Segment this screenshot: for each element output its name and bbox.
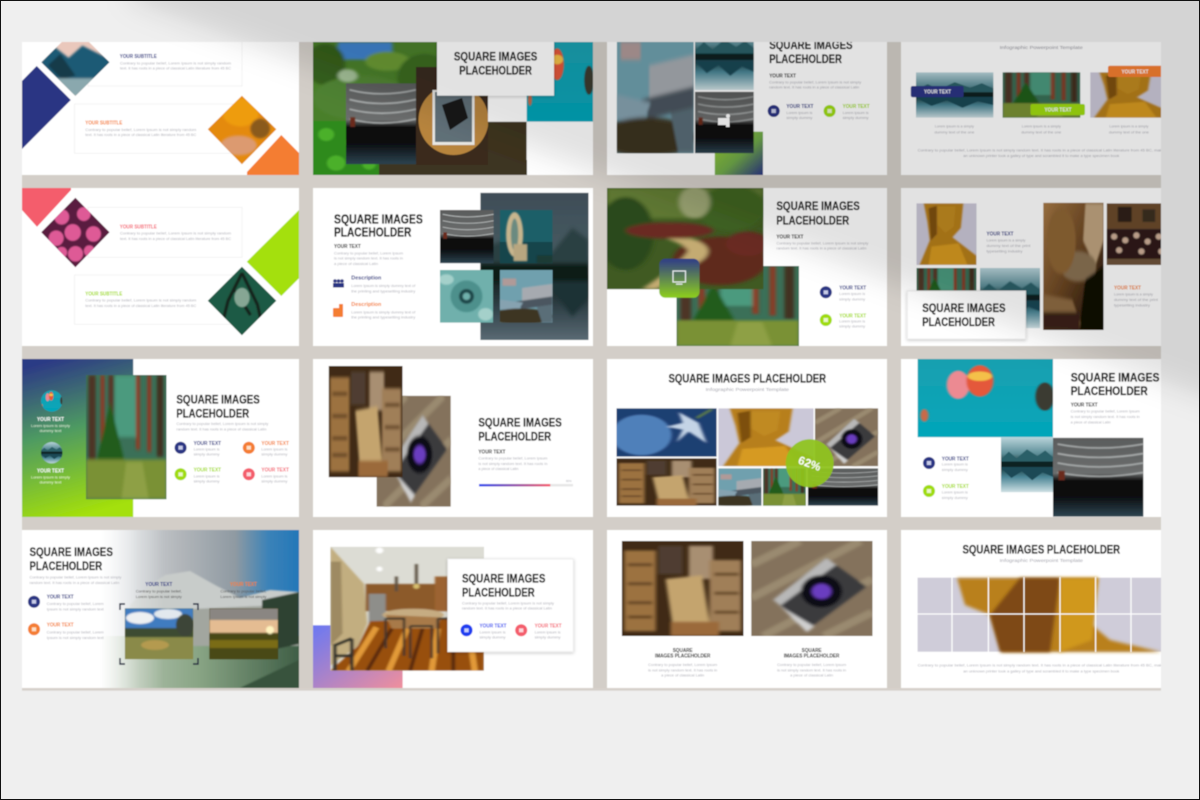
- center caption orange: Lorem Ipsum is not simply: [220, 595, 267, 599]
- panel: slide 13 landscape: [22, 530, 299, 688]
- paragraph: [918, 663, 1168, 673]
- heading: PLACEHOLDER: [176, 406, 249, 420]
- text box two: text. It has roots in a piece of classical Latin literature from 45 BC: [85, 304, 197, 308]
- kitchen photo: [330, 547, 484, 671]
- dark boat photo: [695, 92, 754, 153]
- text box one: YOUR SUBTITLE: [120, 225, 157, 231]
- your text block: [334, 244, 403, 266]
- text box two: [75, 275, 233, 324]
- camera photo: [815, 408, 878, 466]
- meadow photo with brackets: [120, 604, 198, 664]
- item lime: Lorem ipsum is: [942, 491, 968, 495]
- orange diamond shape: [247, 135, 299, 175]
- text box one: text. It has roots in a piece of classical Latin literature from 45 BC: [120, 66, 232, 70]
- orange text: YOUR TEXT: [1114, 285, 1142, 291]
- center caption orange: [220, 582, 267, 599]
- heading: SQUARE IMAGES PLACEHOLDER: [962, 543, 1120, 557]
- item lime: Lorem ipsum is: [839, 320, 866, 324]
- heading: PLACEHOLDER: [30, 559, 102, 573]
- camera photo: [751, 541, 872, 636]
- captions: [934, 125, 1149, 134]
- heading: PLACEHOLDER: [478, 430, 551, 444]
- text box two: Contrary to popular belief, Lorem Ipsum is not simply random: [85, 128, 197, 132]
- title card: Contrary to popular belief, Lorem Ipsum is not simply: [462, 601, 554, 605]
- balloon circle and label: [31, 390, 70, 433]
- lake photo: [694, 41, 754, 90]
- item coral: simply dummy: [535, 636, 561, 640]
- caption right: IMAGES PLACEHOLDER: [784, 654, 839, 660]
- item lime: YOUR TEXT: [942, 484, 969, 490]
- heading: SQUARE IMAGES PLACEHOLDER: [668, 372, 826, 386]
- your text block: is not simply random text. It has roots in: [334, 257, 403, 261]
- title card: SQUARE IMAGES: [462, 572, 545, 586]
- heading: [176, 392, 260, 420]
- item navy: Lorem ipsum is: [194, 447, 220, 451]
- forest photo: [86, 375, 166, 499]
- description navy: [351, 276, 416, 293]
- item navy: [820, 285, 867, 301]
- heading: SQUARE IMAGES: [769, 38, 853, 52]
- center caption orange: YOUR TEXT: [230, 582, 258, 588]
- item navy: Lorem ipsum is: [942, 463, 968, 467]
- item navy: Lorem ipsum is: [786, 111, 813, 115]
- text box one: text. It has roots in a piece of classical Latin literature from 45 BC: [120, 237, 232, 241]
- your text block: random text. It has roots in a piece of classical Latin: [776, 247, 867, 251]
- navy text: Lorem ipsum is a simply: [986, 239, 1026, 243]
- subtitle: Infographic Powerpoint Template: [706, 387, 790, 392]
- title box: PLACEHOLDER: [459, 64, 532, 78]
- item navy: [768, 104, 814, 120]
- caption right: [777, 648, 847, 678]
- item orange: [28, 623, 104, 640]
- item coral: YOUR TEXT: [535, 624, 562, 630]
- gold photo with tag: [1090, 66, 1168, 118]
- captions: dummy text of the one: [1109, 130, 1149, 134]
- lake circle and label: dummy text: [40, 481, 62, 485]
- caption left: [648, 648, 718, 678]
- item navy: YOUR TEXT: [786, 104, 814, 110]
- item blue: Lorem ipsum is: [480, 630, 506, 634]
- panel: slide 1 diamonds navy orange: [21, 28, 299, 175]
- boat photo: [808, 468, 878, 506]
- navy text: [986, 232, 1031, 253]
- item navy: YOUR TEXT: [942, 456, 969, 462]
- paragraph: [918, 148, 1168, 158]
- forest photo: [763, 468, 806, 506]
- progress bar: [479, 479, 573, 486]
- item navy: [923, 456, 969, 472]
- heading: SQUARE IMAGES: [776, 199, 860, 213]
- heading: SQUARE IMAGES: [478, 416, 562, 430]
- title card: PLACEHOLDER: [462, 586, 535, 600]
- description navy: Lorem Ipsum is simply dummy text of: [351, 284, 415, 288]
- white tile: [488, 104, 528, 123]
- item lime: YOUR TEXT: [843, 104, 870, 110]
- books photo: [622, 541, 744, 636]
- icon: hand: [333, 304, 343, 317]
- your text block: Contrary to popular belief, Lorem Ipsum is not simply: [769, 80, 862, 84]
- item lime: simply dummy: [194, 480, 220, 484]
- item lime: YOUR TEXT: [839, 313, 867, 319]
- orange text: dummy text of the print: [1114, 298, 1158, 302]
- navy text: typesetting industry: [986, 249, 1023, 253]
- caption right: Contrary to popular belief, Lorem Ipsum: [777, 663, 847, 667]
- gold portrait: [916, 203, 976, 265]
- books photo: [616, 458, 717, 506]
- panel: slide 11 mosaic with 62 percent: [607, 359, 887, 517]
- text box one: [88, 207, 242, 257]
- panel: slide 12 balloons: [901, 359, 1161, 517]
- camera print: [432, 90, 474, 145]
- item lime: simply dummy: [942, 496, 968, 500]
- item lime: [175, 468, 222, 484]
- panel: slide 6 collage with descriptions: [313, 188, 593, 346]
- your text block: Contrary to popular belief, Lorem Ipsum is not simply: [776, 241, 869, 245]
- text box one: Contrary to popular belief, Lorem Ipsum is not simply random: [120, 61, 231, 65]
- boat photo: [346, 83, 416, 164]
- panel: slide 3 room collage: [606, 42, 888, 176]
- succulent photo: [439, 270, 493, 323]
- coral shape: [22, 188, 71, 227]
- text box one: YOUR SUBTITLE: [120, 54, 157, 60]
- forest photo: [676, 266, 799, 346]
- item lime: YOUR TEXT: [194, 468, 222, 474]
- item orange: Lorem ipsum is: [261, 447, 288, 451]
- your text block: [776, 235, 869, 251]
- captions: Lorem ipsum is a simply: [1022, 125, 1061, 129]
- item navy: simply dummy: [839, 297, 866, 301]
- heading: PLACEHOLDER: [1071, 384, 1148, 398]
- caption right: is not simply random text. It has roots in: [777, 668, 846, 672]
- forest photo with tag: [1003, 72, 1085, 118]
- your text block: Contrary to popular belief, Lorem Ipsum: [478, 457, 548, 461]
- your text block: YOUR TEXT: [478, 449, 506, 455]
- item blue: [460, 624, 507, 640]
- percent badge: [786, 439, 834, 487]
- garden photo: [598, 186, 770, 289]
- sofa photo: [488, 270, 554, 324]
- heading: SQUARE IMAGES: [334, 212, 423, 227]
- caption left: Contrary to popular belief, Lorem Ipsum: [648, 663, 718, 667]
- heading: [769, 41, 853, 64]
- your text block: Contrary to popular belief, Lorem Ipsum: [1071, 410, 1140, 414]
- landscape photo: [100, 530, 299, 688]
- panel: slide 14 kitchen: [313, 530, 593, 688]
- item orange: [243, 441, 290, 457]
- caption left: is not simply random text. It has roots in: [648, 668, 717, 672]
- forest photo: [916, 268, 976, 313]
- your text block: [769, 73, 862, 89]
- earth block: [487, 121, 528, 161]
- caption left: SQUARE: [673, 648, 693, 654]
- item navy: Contrary to popular belief, Lorem: [47, 602, 104, 606]
- your text block: a piece of classical Latin: [1071, 420, 1111, 424]
- orange text: typesetting industry: [1114, 304, 1151, 308]
- earth ground: [379, 160, 527, 175]
- item lime: Lorem ipsum is: [194, 474, 220, 478]
- balloon photo: [918, 359, 1054, 437]
- center caption navy: Contrary to popular belief,: [136, 590, 182, 594]
- lake photo with tag: YOUR TEXT: [924, 90, 952, 96]
- heading: SQUARE IMAGES: [30, 545, 113, 559]
- item navy: [175, 441, 222, 457]
- lime shape: [247, 210, 299, 296]
- balloon photo: [527, 42, 594, 122]
- item navy: YOUR TEXT: [839, 285, 867, 291]
- item orange: Ipsum is not simply random text: [47, 636, 104, 640]
- caption right: a piece of classical Latin: [790, 674, 833, 678]
- orange text: Lorem ipsum is a simply: [1114, 292, 1153, 296]
- title box: [437, 42, 554, 96]
- progress bar: 80%: [566, 479, 572, 483]
- paragraph: Contrary to popular belief, Lorem Ipsum is not simply random text. It has roots in a piece of classical Latin literature from 45 BC, making: [918, 663, 1168, 667]
- flower diamond photo: [41, 197, 110, 268]
- item coral: Lorem ipsum is: [261, 474, 288, 478]
- heading: PLACEHOLDER: [776, 213, 849, 227]
- item lime: simply dummy: [843, 116, 869, 120]
- camera photo: [377, 396, 451, 507]
- balloon circle and label: Lorem ipsum is simply: [31, 424, 70, 428]
- heading: SQUARE IMAGES: [176, 392, 260, 406]
- title box: [907, 291, 1026, 339]
- title box: SQUARE IMAGES: [922, 301, 1006, 315]
- text box one: [88, 53, 242, 86]
- item blue: simply dummy: [480, 636, 506, 640]
- item coral: [515, 624, 562, 640]
- your text block: YOUR TEXT: [769, 73, 797, 79]
- text box two: YOUR SUBTITLE: [85, 121, 123, 127]
- title card: [448, 559, 573, 652]
- tree canopy photo: [312, 41, 438, 122]
- item lime: simply dummy: [839, 325, 866, 329]
- paragraph: an unknown printer took a galley of type and scrambled it to make a type specimen book: [963, 154, 1120, 158]
- caption left: a piece of classical Latin: [661, 674, 704, 678]
- text box two: YOUR SUBTITLE: [85, 291, 123, 297]
- your text block: random text. It has roots in a piece of classical Latin: [769, 85, 859, 89]
- item coral: simply dummy: [261, 480, 288, 484]
- title box: SQUARE IMAGES: [454, 49, 537, 63]
- description navy: Description: [351, 276, 381, 282]
- text box two: [75, 104, 233, 153]
- sunset photo: [209, 608, 278, 660]
- your text block: [1071, 403, 1140, 424]
- item orange: Contrary to popular belief, Lorem: [47, 631, 104, 635]
- captions: dummy text of the one: [934, 130, 975, 134]
- item coral: [243, 468, 290, 484]
- your text block: YOUR TEXT: [776, 235, 804, 241]
- gradient block: [313, 625, 403, 688]
- paragraph: Contrary to popular belief, Lorem Ipsum is not simply: [30, 576, 122, 580]
- your text block: YOUR TEXT: [334, 244, 361, 250]
- item orange: YOUR TEXT: [47, 623, 74, 629]
- text box two: text. It has roots in a piece of classical Latin literature from 45 BC: [85, 133, 197, 137]
- crowd photo: [1107, 203, 1169, 265]
- gradient square: [715, 132, 763, 175]
- panel: slide 16 grid image: [901, 530, 1168, 688]
- center caption navy: Lorem Ipsum is not simply: [136, 595, 182, 599]
- your text block: YOUR TEXT: [1071, 403, 1098, 409]
- lake circle and label: [31, 442, 70, 485]
- paragraph: Contrary to popular belief, Lorem Ipsum is not simply: [176, 422, 269, 426]
- lake circle and label: Lorem ipsum is simply: [31, 475, 70, 479]
- panel: slide 8 gold cat collage: [901, 188, 1169, 346]
- ferris wheel photo: [500, 210, 553, 263]
- percent badge: 62%: [796, 455, 822, 474]
- panel: slide 5 diamonds coral lime: [22, 188, 299, 346]
- wooden table photo: [416, 67, 488, 165]
- description orange: the printing and typesetting industry: [351, 316, 416, 320]
- panel: slide 7 garden path: [598, 186, 887, 346]
- item orange: simply dummy: [261, 453, 288, 457]
- description orange: Description: [351, 302, 381, 308]
- gold photo with tag: YOUR TEXT: [1122, 69, 1149, 75]
- mountain diamond photo: [41, 42, 110, 96]
- heading: PLACEHOLDER: [334, 225, 411, 240]
- your text block: is not simply random text. It has roots in: [1071, 415, 1140, 419]
- item navy: simply dummy: [194, 453, 220, 457]
- heading: [1071, 371, 1160, 398]
- icon tile: monitor: [659, 259, 700, 298]
- item navy: [28, 595, 104, 611]
- panel: slide 4 three tagged photos: [901, 42, 1168, 175]
- item navy: Ipsum is not simply random text: [47, 607, 104, 611]
- gold photo: [718, 408, 814, 466]
- balloon circle and label: dummy text: [40, 429, 62, 433]
- heading: SQUARE IMAGES: [1071, 371, 1160, 385]
- item orange: YOUR TEXT: [261, 441, 290, 447]
- your text block: [478, 449, 548, 471]
- sofa photo: [616, 42, 694, 154]
- panel: slide 9 gradient side panel: [22, 359, 299, 517]
- your text block: a piece of classical Latin: [334, 262, 378, 266]
- autumn diamond photo: [207, 95, 277, 165]
- center caption orange: Contrary to popular belief,: [220, 590, 267, 594]
- balloon circle and label: YOUR TEXT: [37, 417, 65, 423]
- sofa photo: [709, 468, 762, 507]
- caption left: IMAGES PLACEHOLDER: [655, 654, 711, 660]
- dark lake photo: [480, 193, 589, 340]
- item navy: YOUR TEXT: [194, 441, 222, 447]
- navy diamond shape: [21, 66, 71, 150]
- heading: [776, 199, 860, 227]
- navy text: YOUR TEXT: [986, 232, 1014, 238]
- your text block: is not simply random text. It has roots in: [478, 462, 548, 466]
- subtitle: Infographic Powerpoint Template: [1000, 45, 1084, 50]
- lake photo: [1001, 437, 1053, 492]
- description orange: [351, 302, 416, 320]
- boat photo: [440, 210, 494, 263]
- books photo: [329, 366, 403, 477]
- item coral: Lorem ipsum is: [535, 630, 561, 634]
- item navy: YOUR TEXT: [47, 595, 74, 601]
- paragraph: an unknown printer took a galley of type and scrambled it to make a type specimen book: [963, 669, 1120, 673]
- panel: slide 10 books and camera: [313, 359, 593, 517]
- paragraph: random text. It has roots in a piece of classical Latin: [176, 427, 267, 431]
- orange text: [1114, 285, 1158, 308]
- title box: PLACEHOLDER: [922, 315, 995, 329]
- item navy: simply dummy: [786, 116, 813, 120]
- cat photo: [1043, 203, 1104, 330]
- your text block: Contrary to popular belief, Lorem Ipsum: [334, 251, 403, 255]
- caption right: SQUARE: [802, 648, 822, 654]
- lake photo: [980, 268, 1040, 328]
- lily photo: [611, 408, 717, 457]
- lake photo with tag: [911, 72, 993, 118]
- captions: dummy text of the one: [1021, 130, 1062, 134]
- heading: PLACEHOLDER: [769, 52, 842, 66]
- description orange: Lorem Ipsum is simply dummy text of: [351, 311, 415, 315]
- your text block: a piece of classical Latin: [478, 467, 519, 471]
- captions: Lorem ipsum is a simply: [1109, 125, 1149, 129]
- item blue: YOUR TEXT: [480, 624, 507, 630]
- item lime: [923, 484, 969, 500]
- heading: [478, 416, 562, 444]
- item lime: [824, 104, 870, 120]
- moss photo: [313, 121, 379, 175]
- item lime: Lorem ipsum is: [843, 111, 869, 115]
- title card: random text. It has roots in a piece of classical Latin: [462, 606, 552, 610]
- text box two: Contrary to popular belief, Lorem Ipsum is not simply random: [85, 299, 197, 303]
- icon: person at desk: [718, 114, 730, 127]
- captions: Lorem ipsum is a simply: [935, 125, 974, 129]
- item navy: simply dummy: [942, 468, 968, 472]
- paragraph: random text. It has roots in a piece of classical Latin: [30, 581, 120, 585]
- green diamond photo: [207, 266, 277, 336]
- center caption navy: YOUR TEXT: [145, 582, 173, 588]
- forest photo with tag: YOUR TEXT: [1044, 108, 1072, 114]
- panel: slide 2 collage: [306, 42, 594, 175]
- paragraph: [30, 576, 122, 585]
- description navy: the printing and typesetting industry: [351, 289, 416, 293]
- gradient panel: [22, 359, 133, 517]
- panel: slide 15 two photos: [607, 530, 887, 688]
- item navy: Lorem ipsum is: [839, 292, 866, 296]
- navy text: dummy text of the print: [986, 244, 1031, 248]
- text box one: Contrary to popular belief, Lorem Ipsum is not simply random: [120, 231, 231, 235]
- lake circle and label: YOUR TEXT: [37, 468, 65, 474]
- center caption navy: [136, 582, 182, 599]
- paragraph: [176, 422, 269, 431]
- boat photo: [1053, 438, 1143, 517]
- item coral: YOUR TEXT: [261, 468, 290, 474]
- heading: [30, 545, 113, 573]
- gridded gold photo: [917, 577, 1161, 652]
- icon: people: [333, 279, 344, 288]
- paragraph: Contrary to popular belief, Lorem Ipsum is not simply random text. It has roots in a piece of classical Latin literature from 45 BC, making: [918, 148, 1168, 152]
- subtitle: Infographic Powerpoint Template: [1000, 558, 1084, 563]
- heading: [334, 212, 423, 240]
- item lime: [820, 313, 867, 329]
